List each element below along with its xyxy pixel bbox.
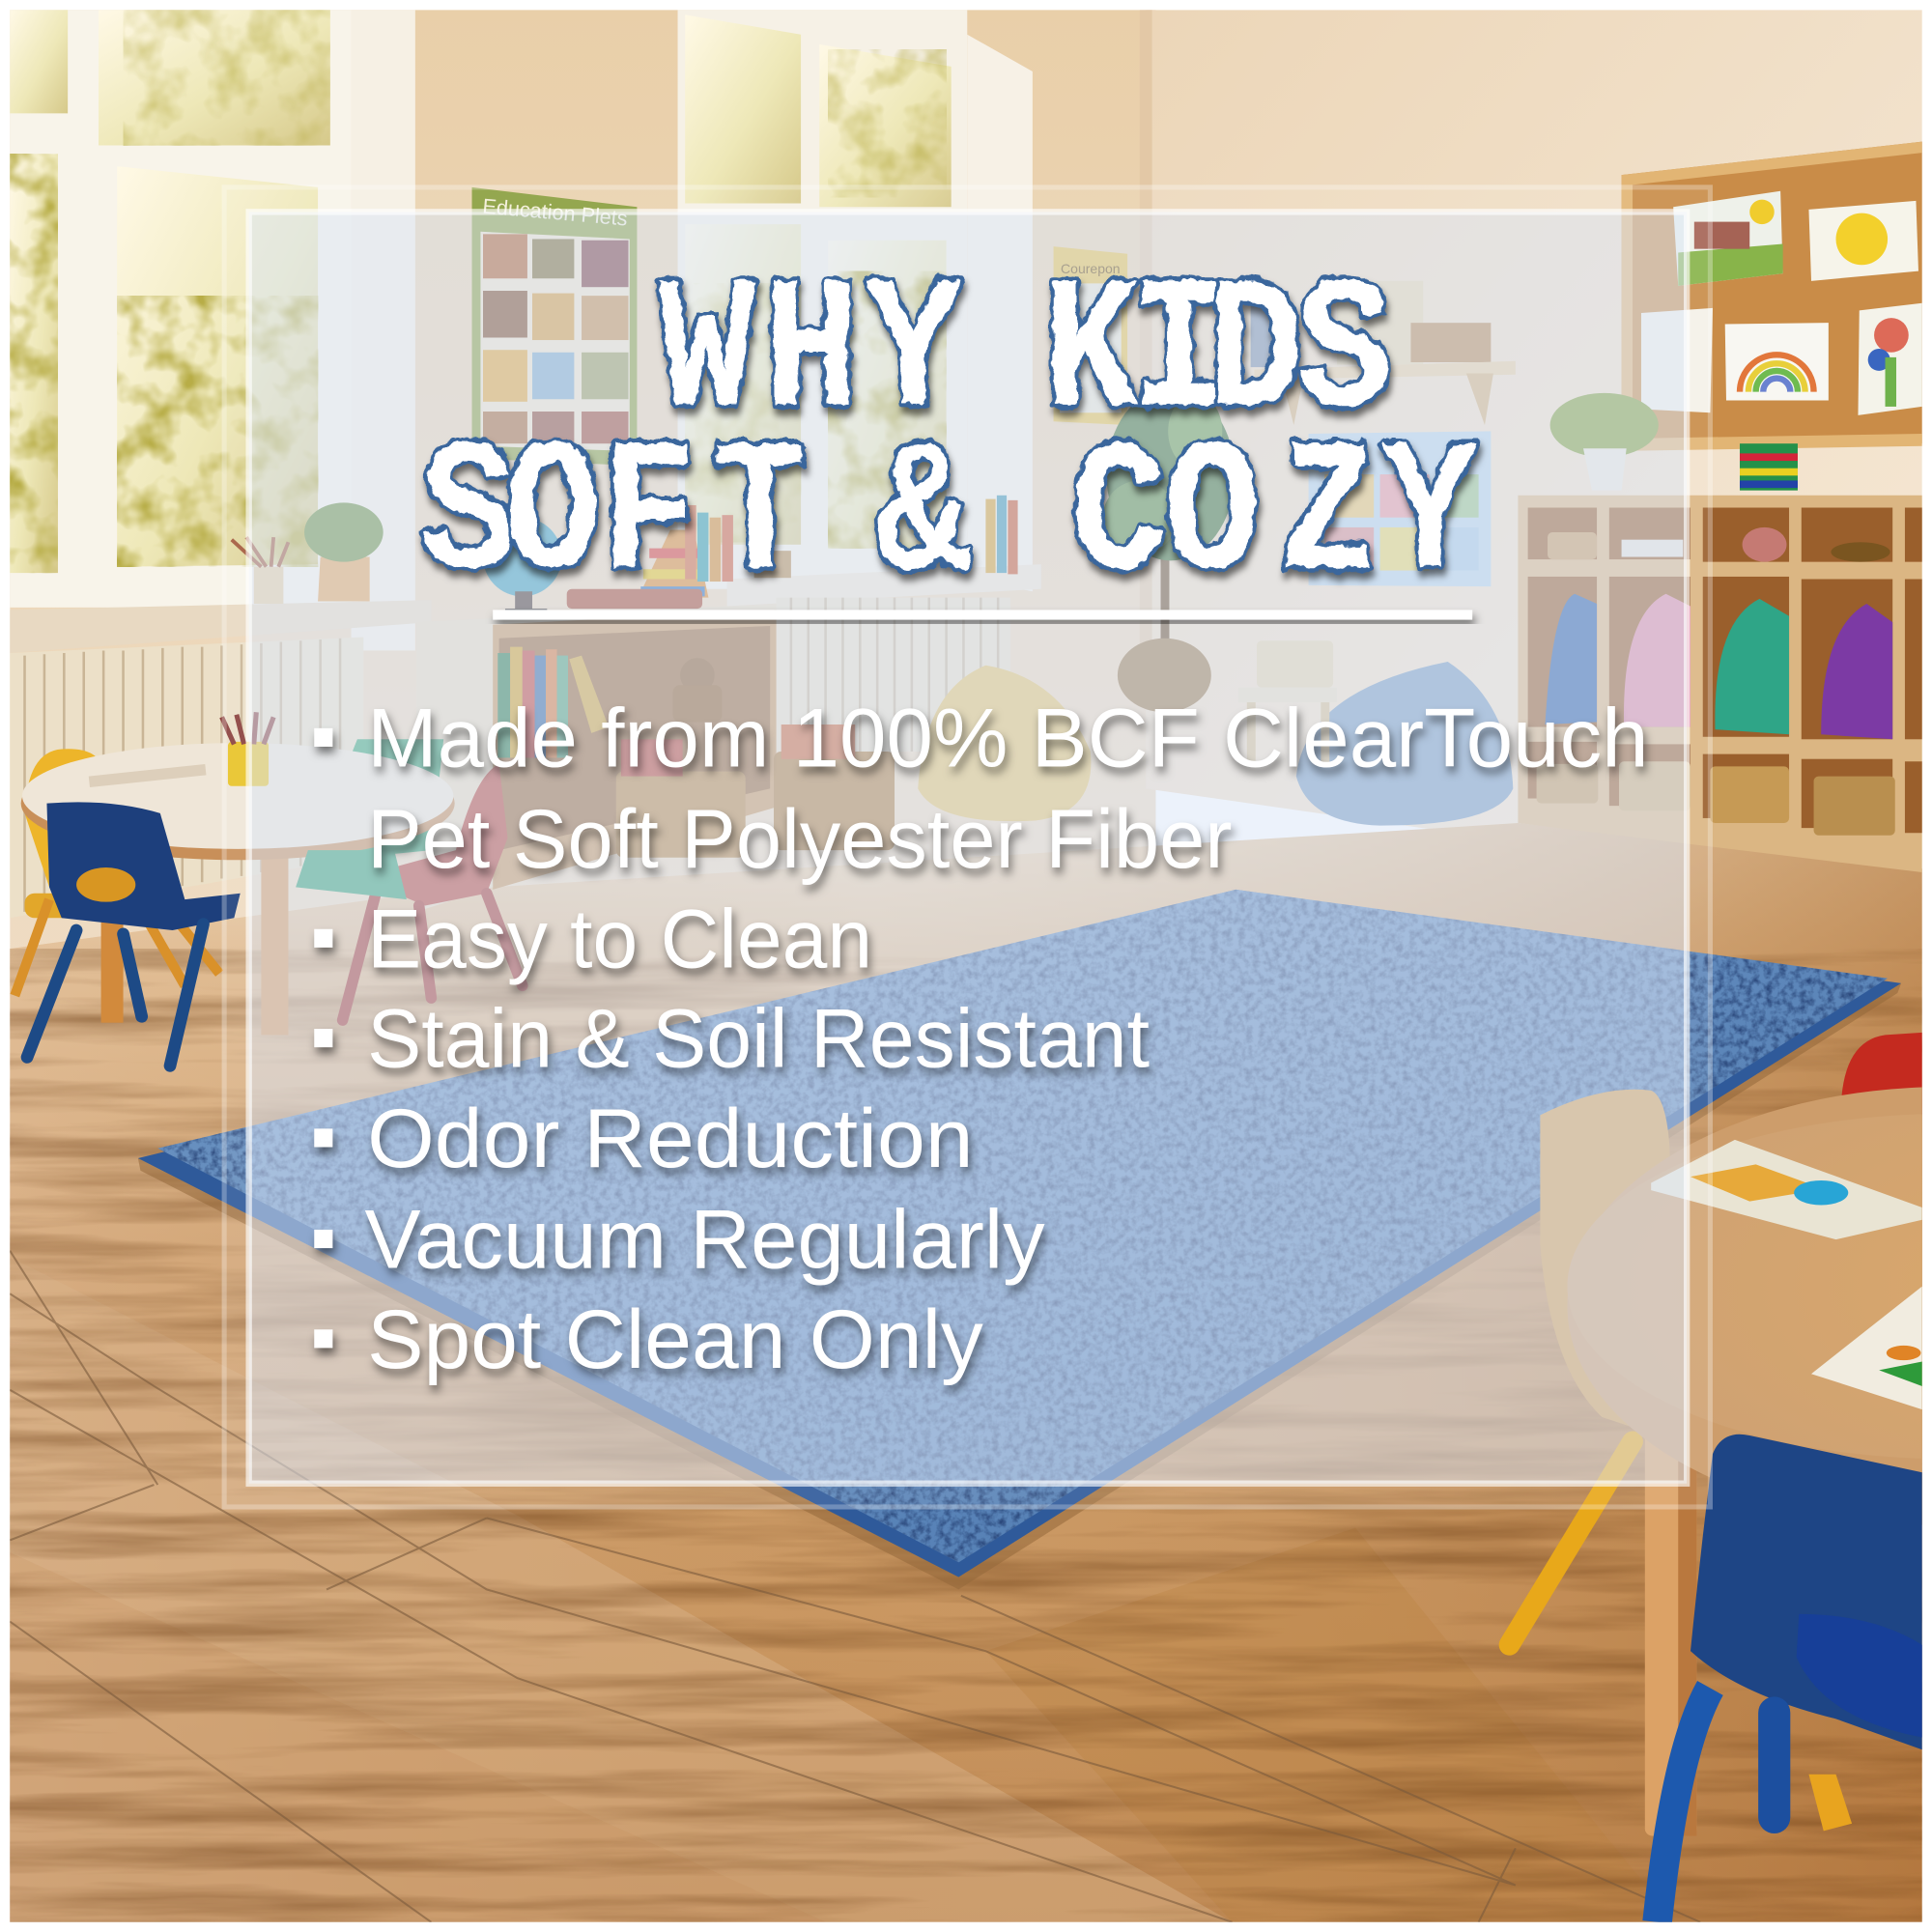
green education poster: Education Plets: [482, 194, 629, 231]
wall chart: [1309, 431, 1491, 586]
title line 2: SOFT & COZY: [421, 412, 1478, 624]
bullet 4: Odor Reduction: [367, 1092, 974, 1185]
green education poster: [472, 187, 637, 466]
bullet 1: Pet Soft Polyester Fiber: [367, 792, 1233, 886]
frosted text panel: [249, 212, 1687, 1484]
yellow wall poster: Courepon: [1061, 261, 1121, 276]
bullet list: [314, 691, 1649, 1386]
yellow wall poster: [1054, 246, 1127, 425]
small round table with chairs: [14, 712, 523, 1065]
bullet 5: Vacuum Regularly: [365, 1192, 1045, 1286]
outer frosted frame: [222, 185, 1713, 1509]
blue rug: [138, 890, 1901, 1589]
title: Why Kids Soft & Cozy: [421, 249, 1478, 624]
bullet 1: Made from 100% BCF ClearTouch: [367, 691, 1649, 784]
low bookcase: [416, 604, 895, 912]
bullet 6: Spot Clean Only: [367, 1293, 983, 1386]
bean bags and side stool: [918, 640, 1513, 826]
potted plant on stand: [1104, 407, 1229, 711]
cubby shelves with backpacks: [1518, 496, 1922, 872]
bullet 2: Easy to Clean: [367, 892, 872, 985]
windowsill and center radiator: [727, 564, 1041, 752]
center window: [678, 10, 967, 589]
hanging fern and rainbow blocks: [1550, 393, 1798, 491]
wall shelf: [1251, 281, 1516, 425]
left radiator: [10, 637, 363, 918]
bullet 1: [314, 691, 1649, 886]
desk items on sill: [232, 496, 1018, 614]
back and side walls: [10, 10, 1922, 996]
left windows: [10, 10, 431, 653]
bullet 3: Stain & Soil Resistant: [367, 992, 1150, 1086]
large wooden table with chairs and books: [1509, 1033, 1932, 1922]
corkboard with drawings: [1622, 142, 1922, 451]
wood floor: [10, 823, 1922, 1922]
title line 1: WHY KIDS: [659, 249, 1392, 462]
divider rule under title: [493, 610, 1472, 620]
